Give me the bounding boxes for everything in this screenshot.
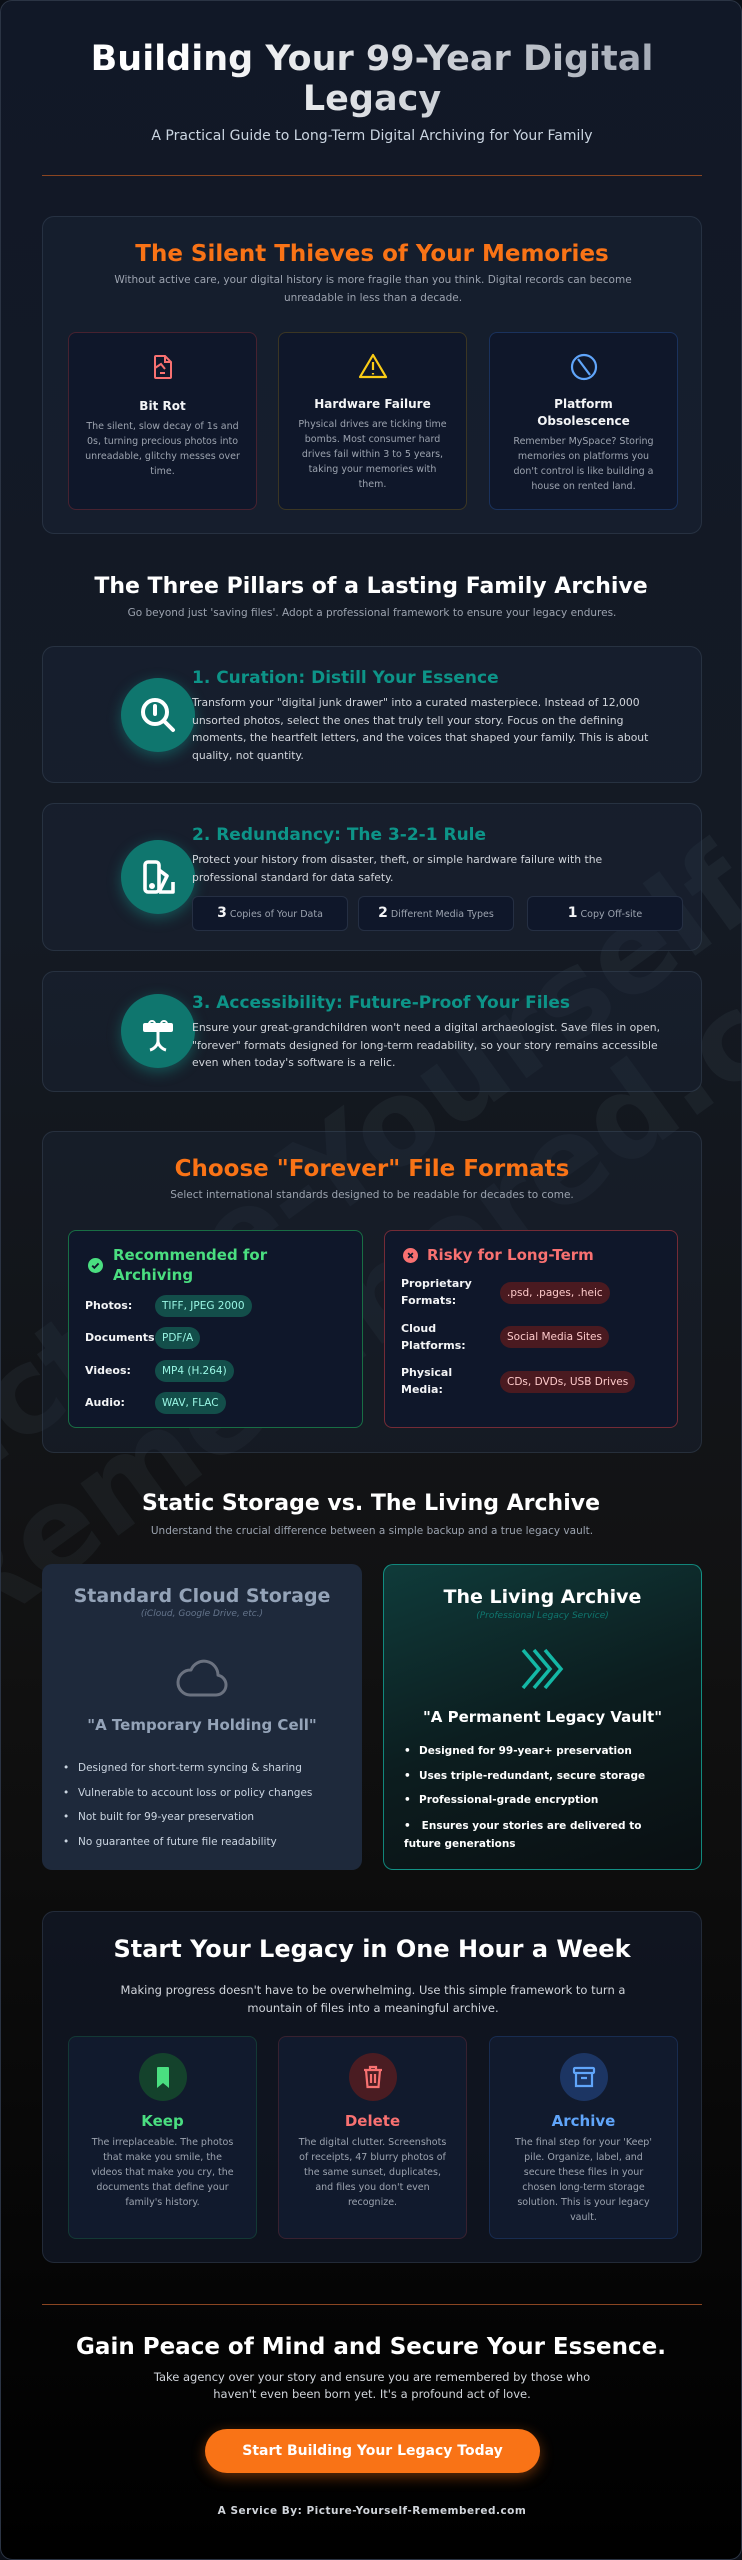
title: redundancy: 2. Redundancy: The 3-2-1 Rule [192,825,486,845]
stat: 2 media: 2 Different Media Types [378,905,494,921]
icon: chevrons [522,1648,564,1690]
stat: 1 offsite: 1 Copy Off-site [568,905,642,921]
button: cta: Start Building Your Legacy Today [242,2443,503,2459]
heading: three pillars: The Three Pillars of a Lasting Family Archive [94,574,648,599]
box: recommended: PDF/A [162,1332,193,1344]
icon: cloud [176,1660,228,1696]
box: risky: .psd, .pages, .heic [507,1287,603,1299]
card: archive [489,2036,678,2239]
icon: copies [121,840,195,914]
stat: 3 copies [192,896,348,931]
row: videos: Videos: [85,1364,131,1377]
box: risky: CDs, DVDs, USB Drives [507,1376,628,1388]
stat: 3 copies: 3 Copies of Your Data [217,905,323,921]
text: formats intro: Select international standards designed to be readable for decades to come. [170,1189,574,1201]
footer credit: A Service By: Picture-Yourself-Remembered.com [218,2505,526,2517]
card: archive: Archive [552,2112,615,2130]
box: risky: Social Media Sites [507,1331,602,1343]
icon: banned [570,354,598,380]
panel: standard cloud storage: No guarantee of future file readability [78,1836,277,1848]
card: delete: Delete [345,2112,400,2130]
panel: living archive [383,1564,702,1870]
box: recommended: TIFF, JPEG 2000 [162,1300,245,1312]
box: recommended [68,1230,363,1428]
card: archive: The final step for your 'Keep' pile. Organize, label, and secure these files in your chosen long-term storage solution. This is your legacy vault. [515,2137,652,2223]
title: cloud storage: Standard Cloud Storage [74,1585,330,1607]
quote: holding cell: "A Temporary Holding Cell" [87,1716,317,1734]
card: keep [68,2036,257,2239]
icon: check [88,1258,103,1273]
row: cloud [401,1322,466,1352]
card: delete: The digital clutter. Screenshots of receipts, 47 blurry photos of the same sunset, duplicates, and files you don't even recognize. [299,2137,446,2208]
row: cloud: Platforms: [401,1339,466,1352]
card: platform obsolescence [489,332,678,510]
title: accessibility: 3. Accessibility: Future-Proof Your Files [192,993,570,1013]
row: proprietary: Proprietary [401,1277,472,1290]
card: hardware failure [278,332,467,510]
heading: formats: Choose "Forever" File Formats [175,1156,569,1182]
text: pillars intro: Go beyond just 'saving files'. Adopt a professional framework to ensure your legacy endures. [128,607,616,619]
card: platform obsolescence: Obsolescence [537,414,630,428]
panel: living archive: • Ensures your stories are delivered to future generations [404,1820,641,1850]
row: audio: Audio: [85,1396,125,1409]
icon: archive box [560,2053,608,2101]
title: Building Your 99-Year Digital [91,39,653,79]
header: risky: Risky for Long-Term [427,1246,594,1264]
panel: living archive: Uses triple-redundant, secure storage [419,1770,645,1782]
box: recommended: WAV, FLAC [162,1397,219,1409]
panel: start your legacy [42,1911,702,2263]
title [42,39,702,119]
panel: living archive: Designed for 99-year+ preservation [419,1745,632,1757]
card: hardware failure: Physical drives are ticking time bombs. Most consumer hard drives fail within 3 to 5 years, taking your memories with them. [298,419,447,490]
row: photos: Photos: [85,1299,132,1312]
stat: 1 offsite [527,896,683,931]
panel: standard cloud storage: (iCloud, Google Drive, etc.) [141,1609,263,1619]
row: cloud: Cloud [401,1322,436,1335]
header: recommended: Archiving [113,1266,193,1284]
text: thieves intro: Without active care, your digital history is more fragile than you think. Digital records can become unreadable in less than a decade. [114,274,632,304]
text: comparison intro: Understand the crucial difference between a simple backup and a true legacy vault. [151,1525,593,1537]
quote: legacy vault: "A Permanent Legacy Vault" [423,1708,662,1726]
icon: bookmark [139,2053,187,2101]
panel: pillar accessibility [42,971,702,1092]
panel: standard cloud storage: Designed for short-term syncing & sharing [78,1762,302,1774]
list: cloud drawbacks [64,1762,312,1848]
icon: magnifier [121,678,195,752]
icon: signpost [121,994,195,1068]
header: recommended: Recommended for [113,1246,267,1264]
panel: living archive: Professional-grade encryption [419,1794,598,1806]
box: recommended: MP4 (H.264) [162,1365,227,1377]
card: platform obsolescence: Platform [554,397,613,411]
card: keep: Keep [141,2112,184,2130]
heading: start: Start Your Legacy in One Hour a Week [113,1935,631,1963]
card: bit rot: Bit Rot [139,399,186,413]
icon: trash [349,2053,397,2101]
icon: x [403,1248,418,1263]
panel: file formats [42,1131,702,1453]
card: platform obsolescence: Remember MySpace? Storing memories on platforms you don't control is like building a house on rented land. [513,436,654,492]
heading: thieves: The Silent Thieves of Your Memories [135,241,609,267]
row: physical: Media: [401,1383,443,1396]
button: cta [205,2429,540,2473]
card: delete [278,2036,467,2239]
list: archive benefits [404,1745,645,1850]
row: proprietary [401,1277,472,1307]
title: curation: 1. Curation: Distill Your Essence [192,668,499,688]
row: proprietary: Formats: [401,1294,456,1307]
row: physical: Physical [401,1366,452,1379]
panel: pillar curation [42,646,702,783]
subtitle: A Practical Guide to Long-Term Digital Archiving for Your Family [151,128,593,144]
stat: 2 media [358,896,514,931]
panel: standard cloud storage [42,1564,362,1870]
heading: static vs living: Static Storage vs. The Living Archive [142,1491,600,1516]
card: bit rot: The silent, slow decay of 1s and 0s, turning precious photos into unreadable, glitchy messes over time. [85,421,240,477]
heading: peace of mind: Gain Peace of Mind and Secure Your Essence. [76,2334,666,2360]
row: documents: Documents [85,1331,155,1344]
text: redundancy: Protect your history from disaster, theft, or simple hardware failure with the professional standard for data safety. [192,853,602,884]
card: bit rot [68,332,257,510]
card: hardware failure: Hardware Failure [314,397,431,411]
card: keep: The irreplaceable. The photos that make you smile, the videos that make you cry, the documents that define your family's history. [91,2137,234,2208]
text: accessibility: Ensure your great-grandchildren won't need a digital archaeologist. Save files in open, "forever" formats designed for long-term readability, so your story remains accessible even when today's software is a relic. [192,1021,660,1069]
text: closing: Take agency over your story and ensure you are remembered by those who haven't even been born yet. It's a profound act of love. [154,2370,590,2401]
box: risky [384,1230,678,1428]
panel: standard cloud storage: Vulnerable to account loss or policy changes [78,1787,312,1799]
row: physical [401,1366,452,1396]
header: recommended [113,1246,268,1284]
panel: standard cloud storage: Not built for 99-year preservation [78,1811,254,1823]
icon: corrupted file [154,355,172,379]
panel: silent thieves [42,216,702,534]
title: Legacy [303,79,441,119]
text: curation: Transform your "digital junk drawer" into a curated masterpiece. Instead of 12,000 unsorted photos, select the ones that truly tell your story. Focus on the defining moments, the heartfelt letters, and the voices that shaped your family. This is about quality, not quantity. [192,696,648,762]
icon: warning [358,354,388,378]
title: living archive: The Living Archive [444,1586,641,1608]
text: start intro: Making progress doesn't have to be overwhelming. Use this simple framework to turn a mountain of files into a meaningful archive. [121,1983,625,2015]
panel: living archive: (Professional Legacy Service) [476,1611,609,1621]
panel: pillar redundancy [42,803,702,951]
